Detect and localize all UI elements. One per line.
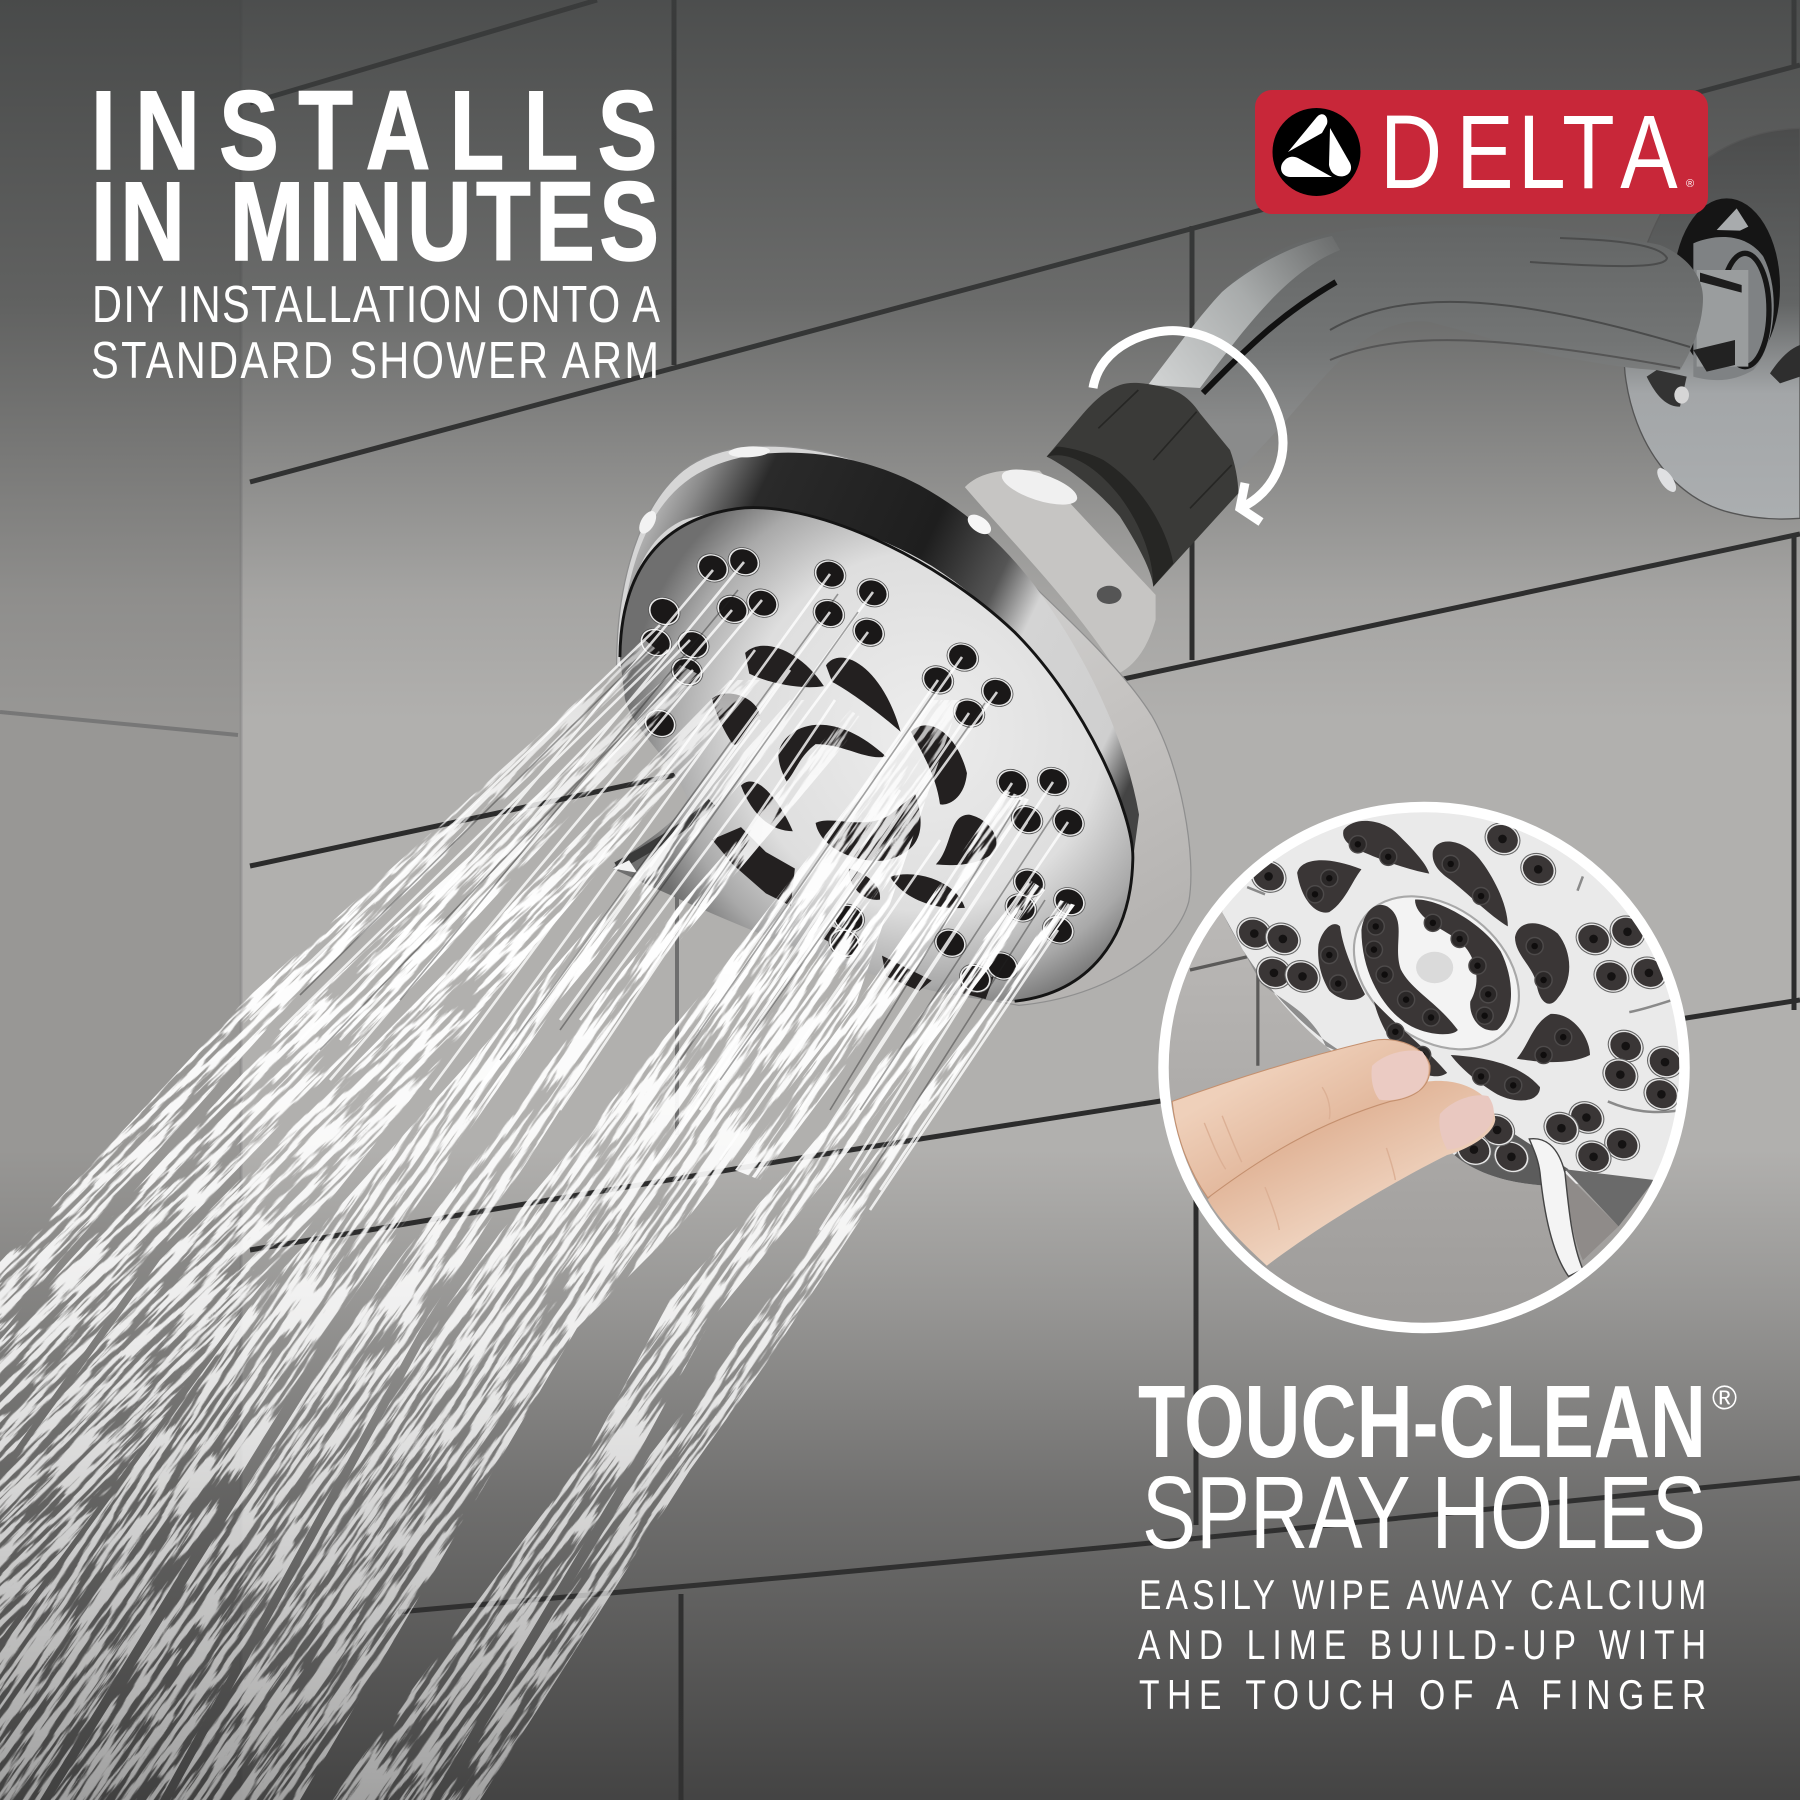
inset chrome handle bbox=[1565, 1173, 1619, 1260]
inset chrome face bbox=[1222, 812, 1680, 1186]
heading: installs in minutes: IN MINUTES bbox=[91, 160, 659, 284]
description: touch-clean: EASILY WIPE AWAY CALCIUM bbox=[1139, 1573, 1706, 1619]
shower arm bbox=[1148, 224, 1703, 470]
description: touch-clean: THE TOUCH OF A FINGER bbox=[1139, 1673, 1706, 1719]
heading: installs in minutes: INSTALLS bbox=[91, 69, 657, 193]
head back body bbox=[965, 470, 1156, 674]
head rim bbox=[620, 453, 1139, 860]
logo emblem bbox=[1272, 108, 1360, 196]
Delta logo: ® bbox=[1686, 178, 1694, 190]
black collar bbox=[1047, 383, 1238, 587]
inset spray nozzles bbox=[1349, 836, 1366, 853]
subheading: DIY installation: DIY INSTALLATION ONTO A bbox=[92, 275, 661, 333]
heading: installs in minutes bbox=[91, 69, 659, 284]
logo wordmark: DELTA bbox=[1380, 94, 1678, 211]
inset white ring bbox=[1164, 807, 1684, 1328]
inset ring groove bbox=[1352, 895, 1520, 1050]
description: touch-clean bbox=[1138, 1573, 1706, 1719]
subheading: DIY installation bbox=[91, 275, 661, 389]
center blobs and spray holes bbox=[712, 646, 996, 999]
Delta logo bbox=[1255, 90, 1708, 214]
inset dark blobs bbox=[1297, 821, 1590, 1101]
description: touch-clean: AND LIME BUILD-UP WITH bbox=[1138, 1623, 1706, 1669]
wall flange and pipe fitting bbox=[1624, 128, 1800, 519]
shower head bbox=[612, 445, 1191, 1005]
inset: touch-clean close-up bbox=[1158, 802, 1690, 1334]
fingers bbox=[1208, 1081, 1495, 1266]
heading: touch-clean spray holes bbox=[1138, 1364, 1737, 1570]
rotation arrow bbox=[1093, 331, 1283, 522]
subheading: DIY installation: STANDARD SHOWER ARM bbox=[91, 331, 659, 389]
water spray bbox=[0, 561, 1075, 1800]
inset background bbox=[1170, 812, 1680, 1322]
heading: touch-clean spray holes: ® bbox=[1712, 1379, 1737, 1417]
head face bbox=[612, 508, 1133, 1001]
